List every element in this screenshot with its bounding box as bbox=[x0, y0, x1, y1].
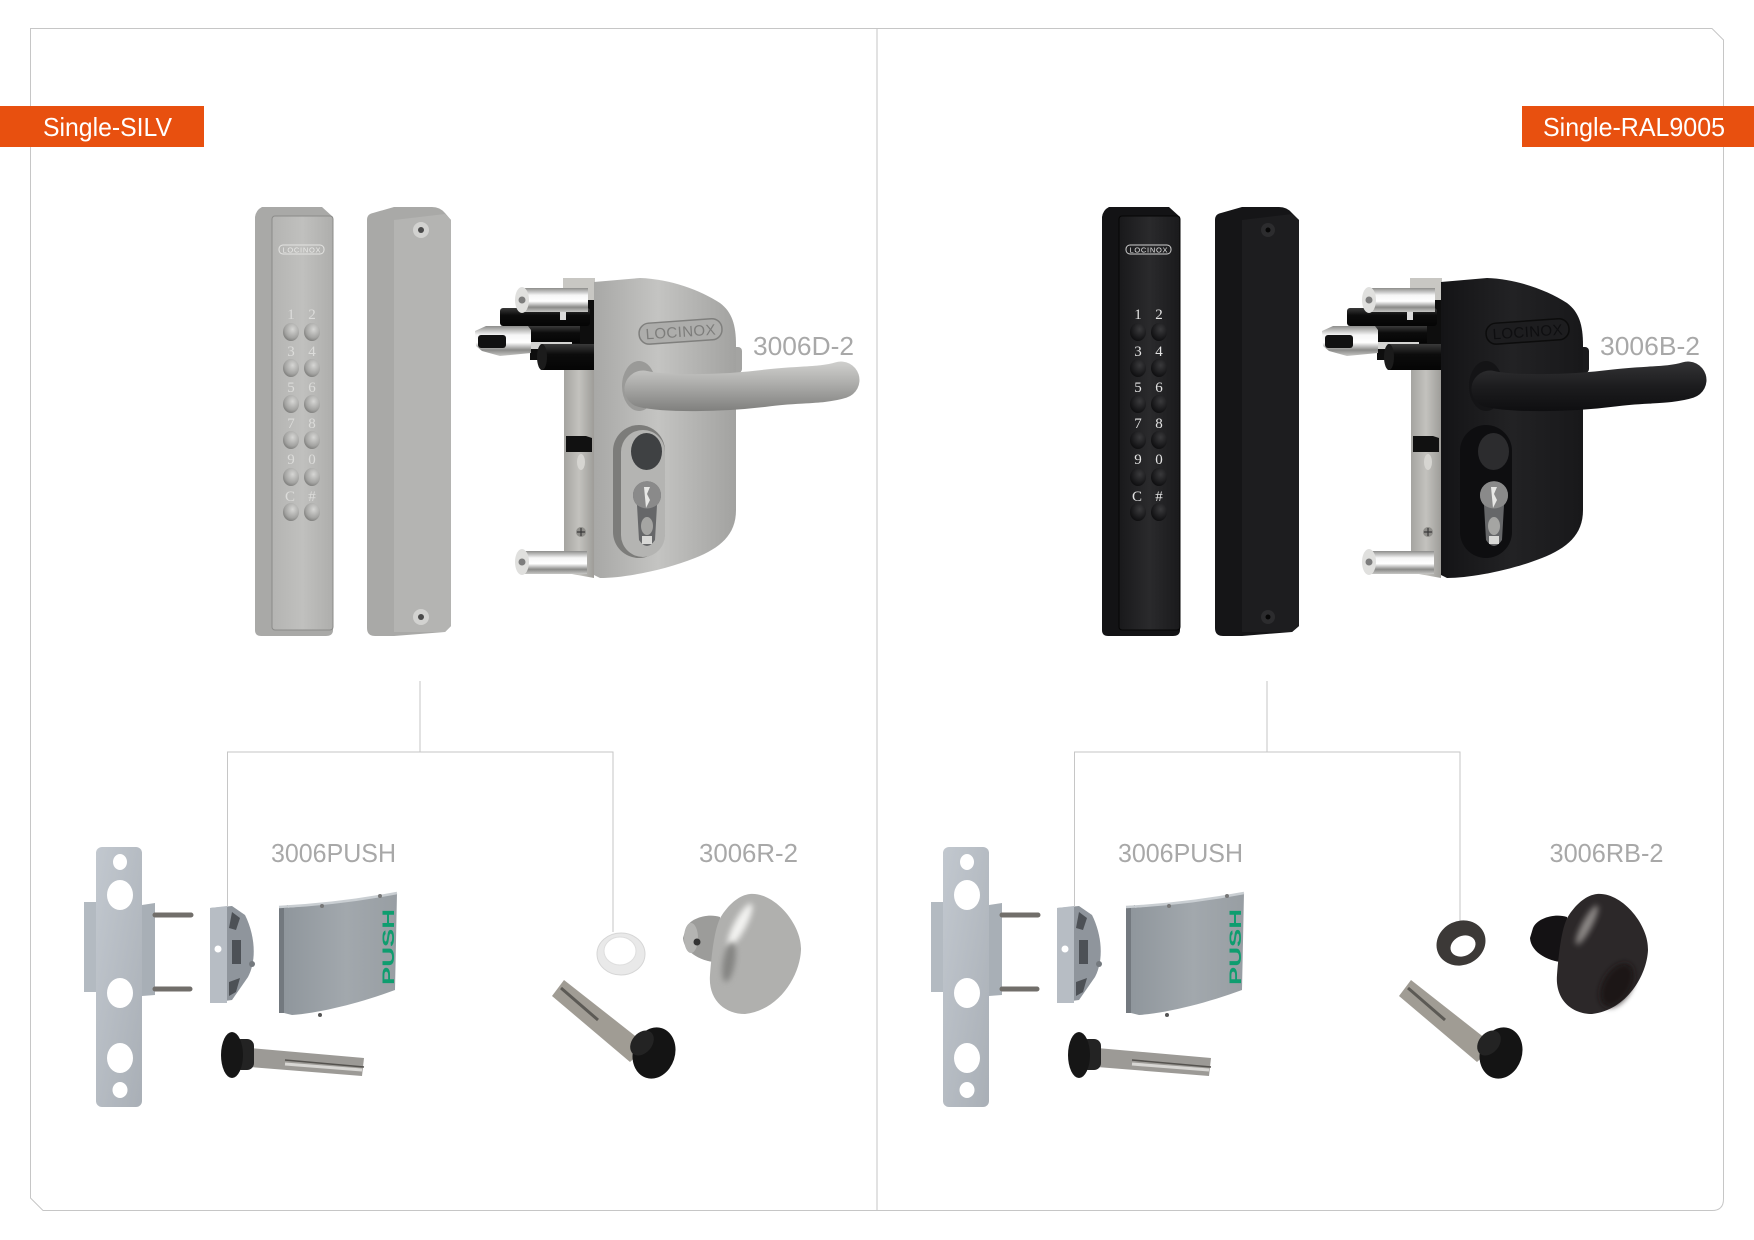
keypad digits: 1 bbox=[287, 307, 295, 323]
keypad buttons bbox=[1130, 323, 1167, 521]
push spindle bbox=[221, 1032, 364, 1078]
keypad digits bbox=[1132, 307, 1163, 505]
latch mechanism bbox=[210, 906, 255, 1003]
keypad digits: 3 bbox=[1134, 344, 1142, 360]
keypad digits: 2 bbox=[308, 307, 316, 323]
label: 3006RB-2: 3006RB-2 bbox=[1550, 838, 1664, 868]
connector bbox=[228, 681, 613, 932]
push pad: PUSH bbox=[1226, 909, 1245, 985]
keypad digits bbox=[285, 307, 316, 505]
keypad digits: 0 bbox=[308, 452, 316, 468]
keypad digits: 0 bbox=[1155, 452, 1163, 468]
strike plate bbox=[84, 847, 191, 1107]
keypad black bbox=[1102, 207, 1180, 636]
panel divider bbox=[876, 28, 878, 1211]
knob bbox=[683, 894, 801, 1014]
lock logo: LOCINOX bbox=[645, 322, 716, 343]
keypad logo: LOCINOX bbox=[282, 246, 320, 254]
panel: Single-RAL9005 bbox=[931, 106, 1754, 1107]
knob spindle bbox=[1399, 980, 1529, 1084]
push pad: PUSH bbox=[379, 909, 398, 985]
label: 3006R-2: 3006R-2 bbox=[699, 838, 798, 868]
knob bbox=[1530, 894, 1648, 1014]
keypad silver bbox=[255, 207, 333, 636]
lever handle bbox=[1490, 380, 1688, 393]
push pad bbox=[1126, 893, 1245, 1017]
keypad digits: 8 bbox=[1155, 416, 1163, 432]
lock logo bbox=[1485, 318, 1570, 345]
push pad bbox=[279, 893, 398, 1017]
keypad digits: 6 bbox=[308, 380, 316, 396]
keypad digits: 5 bbox=[1134, 380, 1142, 396]
tag: Single-SILV bbox=[0, 106, 204, 147]
keypad digits: 5 bbox=[287, 380, 295, 396]
keypad digits: C bbox=[1132, 489, 1142, 505]
gate lock silver bbox=[475, 278, 841, 578]
keypad digits: 8 bbox=[308, 416, 316, 432]
label: 3006PUSH: 3006PUSH bbox=[271, 838, 396, 868]
keypad cover silver bbox=[367, 207, 451, 636]
keypad digits: 1 bbox=[1134, 307, 1142, 323]
ring spacer bbox=[1429, 912, 1493, 974]
keypad digits: 2 bbox=[1155, 307, 1163, 323]
push spindle bbox=[1068, 1032, 1211, 1078]
knob spindle bbox=[552, 980, 682, 1084]
label: 3006PUSH: 3006PUSH bbox=[1118, 838, 1243, 868]
ring spacer bbox=[597, 933, 645, 975]
keypad digits: 7 bbox=[287, 416, 295, 432]
lock logo bbox=[638, 318, 723, 345]
strike plate bbox=[931, 847, 1038, 1107]
keypad digits: # bbox=[308, 489, 316, 505]
keypad digits: 6 bbox=[1155, 380, 1163, 396]
keypad cover black bbox=[1215, 207, 1299, 636]
lever handle bbox=[643, 380, 841, 393]
tag: Single-RAL9005: Single-RAL9005 bbox=[1543, 112, 1725, 142]
keypad digits: 9 bbox=[287, 452, 295, 468]
connector bbox=[1074, 681, 1460, 922]
tag: Single-SILV: Single-SILV bbox=[43, 112, 173, 142]
keypad logo: LOCINOX bbox=[1130, 246, 1168, 254]
keypad digits: 4 bbox=[1155, 344, 1163, 360]
gate lock black bbox=[1322, 278, 1688, 578]
keypad digits: 3 bbox=[287, 344, 295, 360]
keypad buttons bbox=[283, 323, 320, 521]
keypad digits: # bbox=[1155, 489, 1163, 505]
rose bbox=[622, 361, 656, 411]
panel: Single-SILV bbox=[0, 106, 854, 1107]
keypad digits: 7 bbox=[1134, 416, 1142, 432]
label: 3006B-2: 3006B-2 bbox=[1600, 331, 1700, 361]
keypad digits: 9 bbox=[1134, 452, 1142, 468]
label: 3006D-2: 3006D-2 bbox=[753, 331, 854, 361]
cylinder scutcheon bbox=[1460, 425, 1512, 558]
keypad digits: C bbox=[285, 489, 295, 505]
rose bbox=[1469, 361, 1503, 411]
cylinder scutcheon bbox=[613, 425, 665, 558]
keypad digits: 4 bbox=[308, 344, 316, 360]
tag: Single-RAL9005 bbox=[1522, 106, 1754, 147]
lock logo: LOCINOX bbox=[1492, 322, 1563, 343]
latch mechanism bbox=[1057, 906, 1102, 1003]
